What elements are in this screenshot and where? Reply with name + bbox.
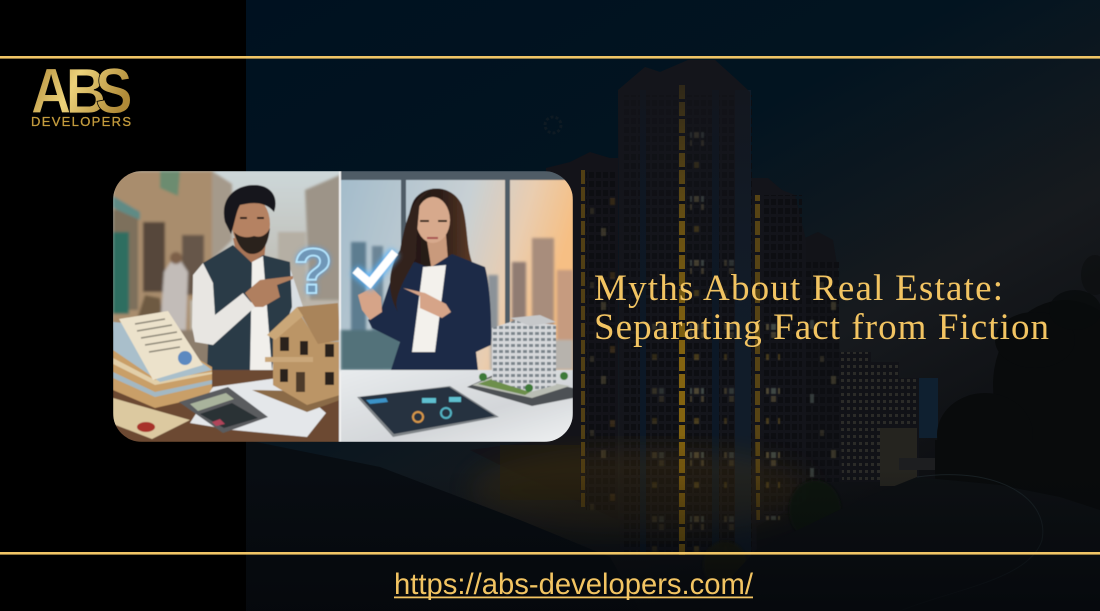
title [594, 268, 1049, 348]
seal [178, 351, 192, 365]
tower right [752, 178, 802, 520]
website link: https://abs-developers.com/ [394, 568, 754, 601]
face [416, 197, 450, 243]
tower left [500, 152, 618, 510]
model building [467, 315, 573, 406]
front hair lock [390, 190, 430, 312]
ground glow and street lights [478, 445, 836, 555]
divider [339, 171, 341, 442]
foreground slopes [246, 442, 1044, 578]
window frame [340, 171, 566, 324]
bottom gold line [0, 552, 1100, 555]
left scene: myth [113, 171, 340, 442]
sleeve and forearm [192, 263, 255, 345]
question mark: ? [293, 235, 333, 307]
hair [390, 189, 472, 315]
faint ornament [545, 117, 561, 133]
neck [232, 238, 266, 263]
logo letters: ABS [31, 55, 133, 127]
calculator [179, 387, 268, 433]
raised hand [358, 288, 382, 320]
street background [113, 171, 340, 365]
woman [358, 189, 491, 370]
blazer [368, 254, 491, 370]
top document [119, 311, 203, 380]
man [192, 185, 303, 370]
neck [426, 235, 448, 272]
scattered papers [190, 377, 326, 437]
bottom-left certificate [113, 398, 190, 439]
dark fade bottom [519, 482, 1043, 611]
panel: myth vs fact photo [113, 171, 573, 442]
stack of papers [113, 311, 212, 408]
question mark: ? [293, 235, 333, 307]
logo: ABS Developers [31, 55, 133, 129]
tower far right [806, 262, 842, 480]
title line 1: Myths About Real Estate: [594, 268, 1003, 309]
right scene: fact [341, 171, 573, 442]
right shoulder of shirt [272, 270, 303, 371]
background photo: night-time residential towers [246, 60, 1100, 611]
cardboard house [252, 303, 340, 412]
eyes [240, 217, 264, 219]
tablet [357, 386, 499, 437]
table [113, 370, 340, 442]
title line 2: Separating Fact from Fiction [594, 307, 1049, 348]
vest [203, 245, 292, 370]
office window view [341, 171, 573, 371]
trees on right [935, 290, 1100, 470]
desk [341, 370, 573, 442]
beard [234, 228, 270, 254]
top gold line [0, 56, 1100, 59]
check mark [355, 252, 395, 283]
hair [224, 185, 276, 234]
hand pointing [245, 276, 293, 307]
main tower [618, 60, 757, 560]
low buildings on far right [841, 352, 938, 486]
blouse [412, 265, 446, 352]
eyes and lips [420, 220, 447, 239]
face [232, 202, 270, 240]
pointing hand [403, 288, 451, 318]
blurred skyline [341, 238, 573, 370]
logo wordmark: DEVELOPERS [31, 114, 131, 129]
shirt placket [250, 256, 272, 370]
